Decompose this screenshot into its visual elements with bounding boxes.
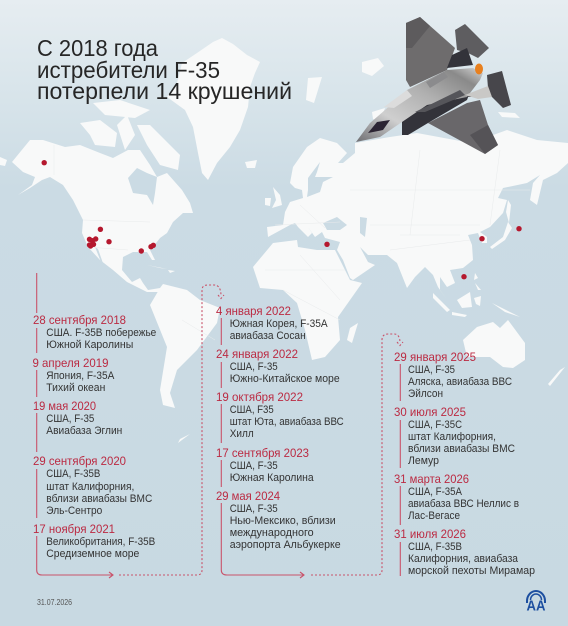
timeline column 3: Аляска, авиабаза ВВС bbox=[408, 376, 512, 388]
timeline column 3: Лас-Вегасе bbox=[408, 510, 460, 522]
title: С 2018 года bbox=[37, 35, 158, 61]
timeline column 3: США, F-35C bbox=[408, 419, 462, 431]
timeline column 2: 24 января 2022 bbox=[216, 347, 298, 361]
timeline column 3: 29 января 2025 bbox=[394, 350, 476, 364]
timeline column 3: 31 июля 2026 bbox=[394, 527, 466, 541]
timeline column 1: Средиземное море bbox=[46, 548, 139, 560]
timeline column 2: авиабаза Сосан bbox=[230, 330, 306, 342]
islands bbox=[147, 58, 565, 443]
Eurasia bbox=[267, 130, 568, 300]
Africa bbox=[253, 240, 362, 360]
North America bbox=[12, 140, 193, 292]
title bbox=[37, 35, 292, 104]
timeline column 2: Нью-Мексико, вблизи bbox=[230, 515, 336, 527]
timeline column 3: вблизи авиабазы ВМС bbox=[408, 443, 515, 455]
F-35 fighter jet bbox=[356, 17, 511, 154]
timeline column 1: США, F-35 bbox=[46, 413, 94, 425]
world map bbox=[0, 38, 568, 443]
timeline column 3: США, F-35B bbox=[408, 541, 462, 553]
timeline column 3: 31 марта 2026 bbox=[394, 472, 469, 486]
timeline column 1: 19 мая 2020 bbox=[33, 399, 96, 413]
timeline column 1: вблизи авиабазы ВМС bbox=[46, 493, 152, 505]
timeline column 1: США. F-35B побережье bbox=[46, 327, 156, 339]
timeline column 2: США, F35 bbox=[230, 404, 274, 416]
timeline column 1: Тихий океан bbox=[46, 382, 105, 394]
timeline column 3: Эйлсон bbox=[408, 388, 443, 400]
South America bbox=[150, 284, 220, 408]
timeline column 1: 29 сентября 2020 bbox=[33, 454, 126, 468]
timeline column 2: США, F-35 bbox=[230, 361, 278, 373]
timeline column 2: 29 мая 2024 bbox=[216, 489, 280, 503]
timeline column 1: 28 сентября 2018 bbox=[33, 313, 126, 327]
timeline column 3: 30 июля 2025 bbox=[394, 405, 466, 419]
timeline column 2: Южная Корея, F-35A bbox=[230, 318, 328, 330]
timeline column 1: Авиабаза Эглин bbox=[46, 425, 122, 437]
timeline connector lines bbox=[37, 273, 403, 578]
timeline column 3: США, F-35 bbox=[408, 364, 455, 376]
timeline column 1: Япония, F-35A bbox=[46, 370, 115, 382]
title: истребители F-35 bbox=[37, 57, 220, 83]
timeline column 2: аэропорта Альбукерке bbox=[230, 539, 341, 551]
timeline column 1: 17 ноября 2021 bbox=[33, 522, 115, 536]
timeline column 3: США, F-35A bbox=[408, 486, 463, 498]
crash markers bbox=[42, 160, 522, 279]
timeline column 2: Хилл bbox=[230, 428, 254, 440]
timeline column 1: Великобритания, F-35B bbox=[46, 536, 155, 548]
inland seas bbox=[95, 162, 367, 266]
timeline column 3: Лемур bbox=[408, 455, 439, 467]
timeline column 2: штат Юта, авиабаза ВВС bbox=[230, 416, 344, 428]
timeline column 1: Южной Каролины bbox=[46, 339, 133, 351]
date stamp: 31.07.2026 bbox=[37, 598, 72, 607]
timeline column 2 bbox=[216, 304, 344, 551]
Arctic islands bbox=[0, 100, 180, 170]
timeline column 2: 19 октября 2022 bbox=[216, 390, 303, 404]
timeline column 1: штат Калифорния, bbox=[46, 481, 134, 493]
timeline column 1: Эль-Сентро bbox=[46, 505, 102, 517]
title: потерпели 14 крушений bbox=[37, 78, 292, 104]
timeline column 2: США, F-35 bbox=[230, 503, 278, 515]
timeline column 2: Южная Каролина bbox=[230, 472, 315, 484]
icon: AA logo bbox=[526, 591, 546, 614]
timeline column 2: 17 сентября 2023 bbox=[216, 446, 309, 460]
timeline column 2: международного bbox=[230, 527, 314, 539]
icon: AA logo: AA bbox=[526, 598, 546, 614]
timeline column 3: штат Калифорния, bbox=[408, 431, 496, 443]
timeline column 3: морской пехоты Мирамар bbox=[408, 565, 535, 577]
timeline column 2: США, F-35 bbox=[230, 460, 278, 472]
timeline column 1: 9 апреля 2019 bbox=[32, 356, 109, 370]
timeline column 1 bbox=[32, 313, 156, 560]
timeline column 3: авиабаза ВВС Неллис в bbox=[408, 498, 519, 510]
timeline column 1: США, F-35B bbox=[46, 468, 100, 480]
timeline column 2: Южно-Китайское море bbox=[230, 373, 340, 385]
timeline column 3: Калифорния, авиабаза bbox=[408, 553, 519, 565]
timeline column 2: 4 января 2022 bbox=[216, 304, 291, 318]
Greenland bbox=[167, 38, 260, 180]
Australia bbox=[463, 320, 525, 368]
timeline column 3 bbox=[394, 350, 535, 577]
